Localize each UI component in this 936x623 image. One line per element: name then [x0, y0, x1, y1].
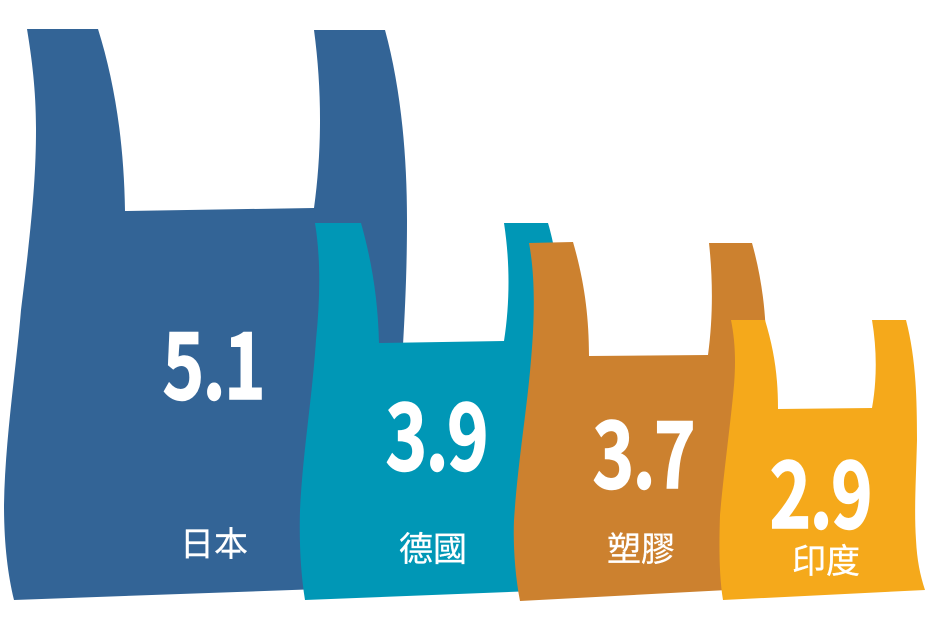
value: 3.7: 3.7 [592, 385, 694, 515]
label: 印度: 印度 [792, 543, 860, 581]
value: 2.9: 2.9 [770, 425, 871, 555]
label: 日本: 日本 [180, 526, 248, 564]
bag: Japan 5.1 [4, 29, 407, 600]
bag: Plastic 3.7 [514, 242, 766, 601]
bag: India 2.9 [719, 320, 925, 600]
bag: Germany 3.9 [300, 223, 562, 600]
label: 德國: 德國 [399, 531, 467, 569]
value: 5.1: 5.1 [162, 296, 264, 426]
label: 塑膠: 塑膠 [607, 531, 675, 569]
value: 3.9: 3.9 [386, 367, 487, 497]
